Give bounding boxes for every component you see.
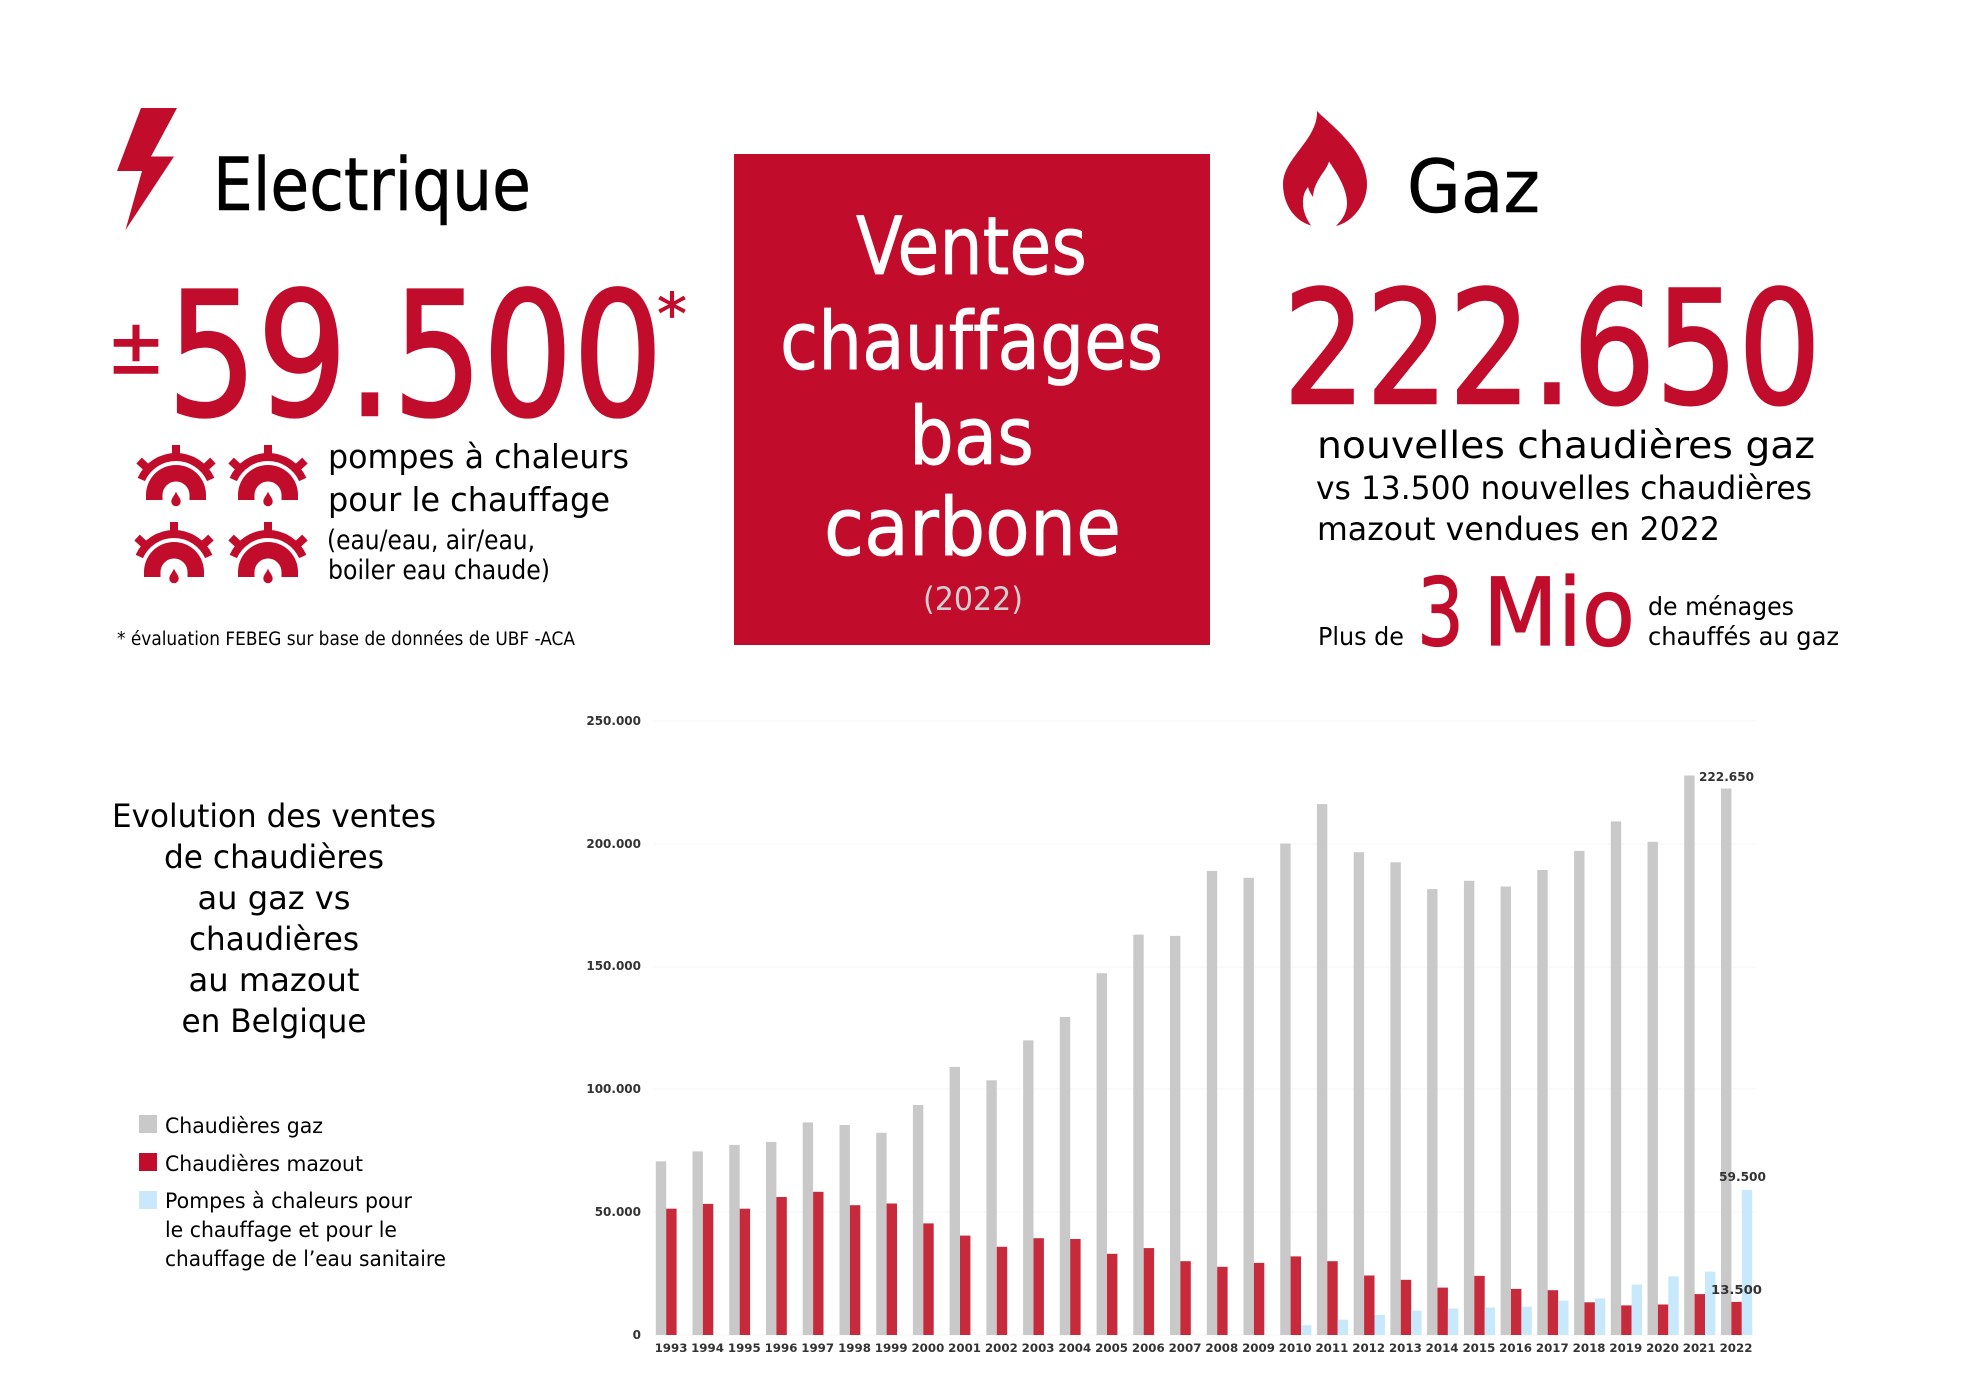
title: Ventes chauffages bas carbone: Ventes bbox=[856, 200, 1087, 293]
stat: 3 Mio: de ménages bbox=[1648, 592, 1794, 621]
x axis labels: 2012 bbox=[1352, 1341, 1385, 1355]
x axis labels: 2005 bbox=[1095, 1341, 1128, 1355]
text: nouvelles chaudieres: vs 13.500 nouvelles chaudières bbox=[1316, 469, 1812, 507]
title: Ventes chauffages bas carbone: carbone bbox=[824, 481, 1121, 574]
stat: 3 Mio: Mio bbox=[1483, 559, 1635, 668]
x axis labels: 2020 bbox=[1646, 1341, 1679, 1355]
x axis labels: 1998 bbox=[838, 1341, 871, 1355]
x axis labels: 2013 bbox=[1389, 1341, 1422, 1355]
x axis labels: 2003 bbox=[1022, 1341, 1055, 1355]
x axis labels: 1999 bbox=[875, 1341, 908, 1355]
x axis labels: 2018 bbox=[1573, 1341, 1606, 1355]
chart heading: chaudières bbox=[189, 920, 359, 958]
x axis labels: 2002 bbox=[985, 1341, 1018, 1355]
x axis labels: 2021 bbox=[1683, 1341, 1716, 1355]
text: pompes a chaleurs: pompes à chaleurs bbox=[328, 437, 629, 476]
bar chart bbox=[586, 714, 1766, 1355]
chart heading: au gaz vs bbox=[198, 879, 350, 917]
x axis labels: 2022 bbox=[1720, 1341, 1752, 1355]
x axis labels: 2011 bbox=[1315, 1341, 1348, 1355]
y axis labels: 0 bbox=[633, 1328, 641, 1342]
x axis labels: 1995 bbox=[728, 1341, 761, 1355]
legend: Chaudières mazout bbox=[165, 1152, 363, 1177]
y axis labels: 200.000 bbox=[586, 837, 641, 851]
x axis labels: 2014 bbox=[1426, 1341, 1459, 1355]
y axis labels: 100.000 bbox=[586, 1082, 641, 1096]
panel: electrique bbox=[107, 108, 687, 650]
x axis labels: 2009 bbox=[1242, 1341, 1275, 1355]
x axis labels: 2017 bbox=[1536, 1341, 1569, 1355]
title: Ventes chauffages bas carbone: bas bbox=[909, 390, 1034, 483]
icons: four heat pumps bbox=[134, 445, 308, 583]
bars: chaudieres mazout bbox=[666, 1192, 1742, 1335]
x axis labels: 2019 bbox=[1609, 1341, 1642, 1355]
x axis labels: 2004 bbox=[1058, 1341, 1091, 1355]
x axis labels: 1996 bbox=[765, 1341, 797, 1355]
stat: 3 Mio: 3 bbox=[1417, 559, 1464, 668]
text: pompes a chaleurs: (eau/eau, air/eau, bbox=[327, 525, 535, 556]
big number: 59.500: 59.500 bbox=[167, 255, 663, 456]
legend bbox=[139, 1114, 446, 1272]
text: pompes a chaleurs: boiler eau chaude) bbox=[328, 555, 550, 586]
bars: chaudieres gaz bbox=[656, 776, 1731, 1335]
x axis labels: 1997 bbox=[801, 1341, 834, 1355]
heading: Electrique: Electrique bbox=[213, 143, 531, 228]
y axis labels: 150.000 bbox=[586, 959, 641, 973]
x axis labels: 2016 bbox=[1499, 1341, 1532, 1355]
text: nouvelles chaudieres bbox=[1316, 424, 1815, 548]
big number: 222.650: 222.650 bbox=[1283, 258, 1821, 441]
year: 2022: (2022) bbox=[923, 580, 1023, 618]
y axis labels: 50.000 bbox=[595, 1205, 641, 1219]
bars: pompes a chaleur bbox=[1301, 1190, 1752, 1335]
x axis labels: 2007 bbox=[1169, 1341, 1201, 1355]
chart heading bbox=[112, 797, 436, 1040]
icon: flame bbox=[1283, 111, 1367, 226]
y axis labels bbox=[586, 714, 641, 1342]
icon: lightning bolt bbox=[117, 108, 177, 230]
text: nouvelles chaudieres: mazout vendues en 2022 bbox=[1317, 510, 1720, 548]
chart heading: Evolution des ventes bbox=[112, 797, 436, 835]
big number: 59.500: * bbox=[657, 282, 687, 348]
x axis labels: 2001 bbox=[948, 1341, 981, 1355]
y axis labels: 250.000 bbox=[586, 714, 641, 728]
x axis labels: 2008 bbox=[1205, 1341, 1238, 1355]
big number: 59.500: ± bbox=[107, 302, 165, 391]
x axis labels: 1994 bbox=[691, 1341, 724, 1355]
data labels: 59.500 bbox=[1719, 1170, 1766, 1184]
stat: 3 Mio: chauffés au gaz bbox=[1648, 622, 1839, 651]
x axis labels: 2015 bbox=[1462, 1341, 1495, 1355]
stat: 3 Mio: Plus de bbox=[1318, 622, 1404, 651]
title: Ventes chauffages bas carbone: chauffages bbox=[780, 295, 1163, 388]
x axis labels: 2010 bbox=[1279, 1341, 1312, 1355]
heading: Gaz: Gaz bbox=[1407, 145, 1540, 230]
legend: Chaudières gaz bbox=[165, 1114, 323, 1139]
panel: central title box bbox=[734, 154, 1210, 645]
data labels bbox=[1699, 770, 1766, 1297]
legend: le chauffage et pour le bbox=[165, 1218, 397, 1243]
x axis labels bbox=[655, 1341, 1752, 1355]
data labels: 13.500 bbox=[1711, 1283, 1762, 1297]
legend: Pompes à chaleurs pour bbox=[165, 1189, 412, 1214]
x axis labels: 1993 bbox=[655, 1341, 687, 1355]
text: pompes a chaleurs bbox=[327, 437, 629, 586]
footnote: * évaluation FEBEG sur base de données de UBF -ACA bbox=[117, 629, 575, 650]
data labels: 222.650 bbox=[1699, 770, 1754, 784]
x axis labels: 2006 bbox=[1132, 1341, 1165, 1355]
chart heading: au mazout bbox=[188, 961, 360, 999]
stat: 3 Mio bbox=[1318, 559, 1839, 668]
chart heading: de chaudières bbox=[164, 838, 384, 876]
panel: gaz bbox=[1283, 111, 1839, 668]
chart heading: en Belgique bbox=[182, 1002, 366, 1040]
legend: chauffage de l’eau sanitaire bbox=[165, 1247, 446, 1272]
text: nouvelles chaudieres: nouvelles chaudières gaz bbox=[1317, 424, 1815, 467]
title: Ventes chauffages bas carbone bbox=[780, 200, 1163, 574]
x axis labels: 2000 bbox=[911, 1341, 944, 1355]
text: pompes a chaleurs: pour le chauffage bbox=[328, 480, 610, 519]
